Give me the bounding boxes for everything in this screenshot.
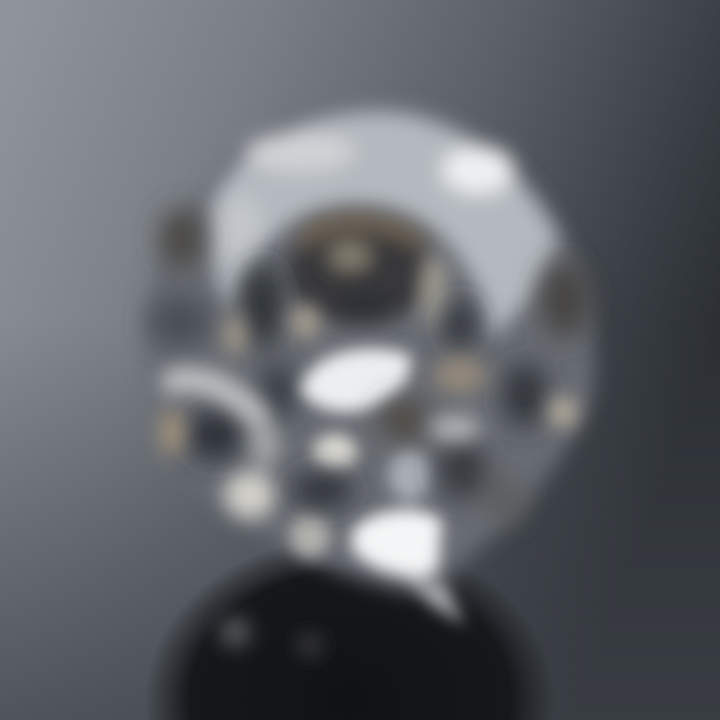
lower and right dark facets bbox=[290, 262, 589, 522]
black pedestal bbox=[140, 530, 560, 720]
background shading toward bottom bbox=[0, 320, 720, 720]
diamond base silhouette bbox=[145, 104, 594, 592]
left facets bbox=[148, 208, 296, 461]
central bright facets bbox=[290, 348, 465, 625]
centre dark table bbox=[288, 213, 446, 328]
pedestal reflections bbox=[220, 617, 322, 656]
upper crown highlight bbox=[208, 112, 558, 340]
diamond body bbox=[145, 104, 594, 625]
